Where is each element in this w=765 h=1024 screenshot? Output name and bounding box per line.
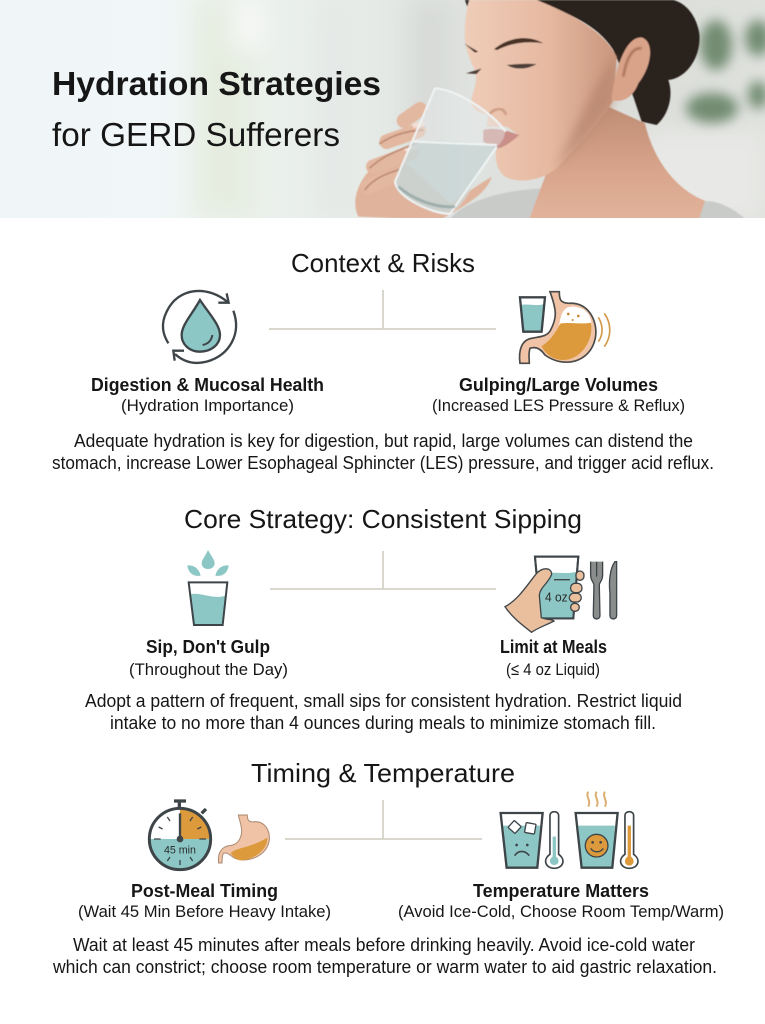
heading: Timing & Temperature bbox=[251, 758, 515, 788]
paragraph bbox=[85, 691, 682, 733]
labels left bbox=[129, 636, 288, 679]
ear bbox=[612, 37, 650, 101]
paragraph: Adopt a pattern of frequent, small sips for consistent hydration. Restrict liquid bbox=[85, 691, 682, 711]
labels right: Limit at Meals bbox=[500, 636, 607, 657]
labels right bbox=[432, 374, 685, 415]
labels right: (Avoid Ice-Cold, Choose Room Temp/Warm) bbox=[398, 902, 724, 921]
connector bbox=[285, 800, 482, 839]
heading: Core Strategy: Consistent Sipping bbox=[184, 504, 582, 534]
icon: sipping glass with droplets bbox=[187, 550, 229, 625]
section: context and risks bbox=[52, 248, 714, 473]
neck and chest bbox=[528, 100, 705, 222]
paragraph: which can constrict; choose room temperature or warm water to aid gastric relaxation. bbox=[52, 957, 717, 977]
paragraph bbox=[52, 431, 714, 473]
labels right bbox=[398, 880, 724, 921]
section: core strategy bbox=[85, 504, 682, 733]
icon: water drop cycle bbox=[163, 291, 236, 363]
eyebrow, eye, lips bbox=[464, 38, 543, 53]
title: for GERD Sufferers bbox=[52, 116, 340, 153]
hair bbox=[535, 0, 700, 125]
icon: ice cold glass and thermometer bbox=[501, 812, 563, 868]
labels left: (Hydration Importance) bbox=[121, 396, 294, 415]
glass of water bbox=[395, 88, 505, 214]
section: timing and temperature bbox=[52, 758, 724, 977]
face shading bbox=[557, 57, 617, 168]
shirt bbox=[452, 188, 744, 218]
paragraph bbox=[52, 935, 717, 977]
icon: stopwatch 45 min bbox=[149, 801, 211, 870]
labels left: Post-Meal Timing bbox=[131, 880, 278, 901]
labels right bbox=[500, 636, 607, 679]
icon: hand holding 4 oz glass with cutlery: 4 oz bbox=[545, 591, 568, 605]
connector bbox=[269, 290, 496, 329]
icon: hand holding 4 oz glass with cutlery bbox=[505, 557, 617, 632]
face bbox=[465, 0, 617, 180]
labels left: Sip, Don't Gulp bbox=[146, 636, 270, 657]
icon: warm glass and thermometer bbox=[576, 792, 638, 868]
labels left: Digestion & Mucosal Health bbox=[91, 374, 324, 395]
icon: stomach bbox=[218, 815, 269, 863]
connector bbox=[270, 551, 496, 589]
paragraph: stomach, increase Lower Esophageal Sphincter (LES) pressure, and trigger acid reflux. bbox=[52, 453, 714, 473]
labels right: (≤ 4 oz Liquid) bbox=[506, 660, 600, 679]
heading: Context & Risks bbox=[291, 248, 475, 278]
icon: stopwatch 45 min: 45 min bbox=[164, 844, 196, 856]
icon: glass and stomach with reflux bbox=[520, 292, 610, 363]
background plant bbox=[686, 20, 765, 123]
labels right: (Increased LES Pressure & Reflux) bbox=[432, 396, 685, 415]
labels left bbox=[78, 880, 331, 921]
labels right: Temperature Matters bbox=[473, 880, 649, 901]
labels right: Gulping/Large Volumes bbox=[459, 374, 658, 395]
title: Hydration Strategies bbox=[52, 65, 381, 102]
labels left: (Throughout the Day) bbox=[129, 660, 288, 679]
labels left: (Wait 45 Min Before Heavy Intake) bbox=[78, 902, 331, 921]
paragraph: Wait at least 45 minutes after meals before drinking heavily. Avoid ice-cold water bbox=[73, 935, 695, 955]
paragraph: intake to no more than 4 ounces during meals to minimize stomach fill. bbox=[110, 713, 656, 733]
paragraph: Adequate hydration is key for digestion, but rapid, large volumes can distend the bbox=[74, 431, 693, 451]
labels left bbox=[91, 374, 324, 415]
header photo: woman drinking water bbox=[0, 0, 765, 233]
hand bbox=[355, 160, 492, 220]
title bbox=[52, 65, 381, 153]
